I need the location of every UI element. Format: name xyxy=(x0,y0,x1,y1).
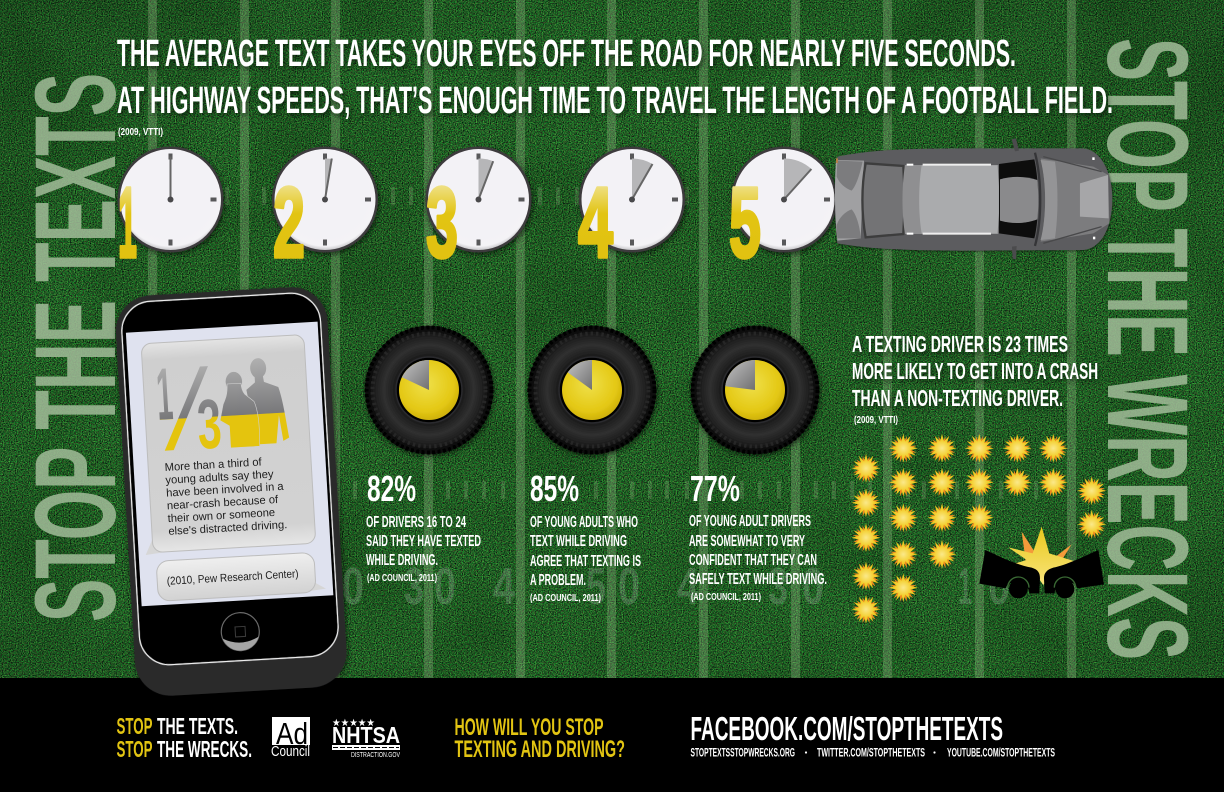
phone xyxy=(114,285,349,698)
field yard numbers: 0 xyxy=(342,558,364,616)
stat 85 percent: OF YOUNG ADULTS WHO xyxy=(530,514,638,531)
message text: near-crash because of xyxy=(167,494,279,512)
logo: nhtsa: NHTSA xyxy=(332,722,400,748)
clock numerals xyxy=(118,167,761,279)
stat 85 percent: (AD COUNCIL, 2011) xyxy=(530,593,601,604)
title xyxy=(117,33,1113,122)
stat 82 percent: WHILE DRIVING. xyxy=(366,552,438,569)
stat 82 percent: (AD COUNCIL, 2011) xyxy=(367,573,437,584)
crash statistic source: (2009, VTTI) xyxy=(854,415,898,426)
campaign slogan: THE WRECKS. xyxy=(157,736,252,762)
logo: ad council: Council xyxy=(271,743,310,760)
web links: TWITTER.COM/STOPTHETEXTS xyxy=(817,748,925,760)
clock 1 xyxy=(118,146,224,252)
facebook address: FACEBOOK.COM/STOPTHETEXTS xyxy=(690,710,1003,747)
message text: have been involved in a xyxy=(166,481,285,500)
clock numerals: 3 xyxy=(426,167,458,279)
stat 85 percent: AGREE THAT TEXTING IS xyxy=(530,553,641,570)
one third graphic xyxy=(154,346,290,466)
phone screen xyxy=(126,322,333,606)
clock numerals: 4 xyxy=(578,167,613,279)
clock 5 xyxy=(731,146,837,252)
clock 4 xyxy=(579,146,685,252)
one third graphic: 1 xyxy=(154,352,175,436)
field yard numbers: 3 xyxy=(404,558,424,616)
logo: ad council xyxy=(271,716,310,760)
stat 77 percent: CONFIDENT THAT THEY CAN xyxy=(689,552,817,569)
stat 77 percent: ARE SOMEWHAT TO VERY xyxy=(689,533,805,550)
stat 85 percent xyxy=(530,468,641,604)
message text: More than a third of xyxy=(164,456,263,474)
crash statistic text: A TEXTING DRIVER IS 23 TIMES xyxy=(852,331,1068,357)
message bubble xyxy=(134,334,316,555)
message text: young adults say they xyxy=(165,469,274,487)
logo: nhtsa: ★★★★★ xyxy=(332,718,375,729)
stat 85 percent: 85% xyxy=(530,468,579,509)
clock numerals: 1 xyxy=(118,167,137,279)
clock 2 xyxy=(272,146,378,252)
crash statistic text: THAN A NON-TEXTING DRIVER. xyxy=(852,385,1063,411)
call to action: HOW WILL YOU STOP xyxy=(454,714,604,741)
car top view xyxy=(835,138,1112,259)
silhouette: woman xyxy=(217,370,260,448)
logo: ad council: Ad xyxy=(276,716,308,751)
field yard numbers: 4 xyxy=(677,558,699,616)
footer xyxy=(0,678,1224,792)
title source: (2009, VTTI) xyxy=(118,127,163,138)
field yard numbers: 4 xyxy=(493,558,515,616)
clock 3 xyxy=(426,146,532,252)
stat 85 percent: TEXT WHILE DRIVING xyxy=(530,533,627,550)
stat 77 percent xyxy=(689,468,827,603)
source bubble xyxy=(156,552,326,601)
source bubble: (2010, Pew Research Center) xyxy=(166,568,299,588)
field hash marks xyxy=(170,187,1038,499)
tire chart 85 percent xyxy=(528,326,656,454)
icon: car crash xyxy=(979,527,1104,598)
campaign slogan: STOP xyxy=(116,736,152,762)
field yard numbers: 1 xyxy=(958,558,972,616)
message text: else's distracted driving. xyxy=(168,519,288,538)
stat 82 percent: 82% xyxy=(367,468,416,509)
stat 77 percent: (AD COUNCIL, 2011) xyxy=(691,592,761,603)
campaign slogan: STOP xyxy=(116,713,152,739)
23 explosion icons xyxy=(850,433,1108,627)
clock numerals: 5 xyxy=(729,167,761,279)
stat 77 percent: 77% xyxy=(690,468,740,509)
clock numerals: 2 xyxy=(273,167,305,279)
field yard numbers: 0 xyxy=(988,558,1010,616)
field yard numbers: 0 xyxy=(434,558,456,616)
call to action: TEXTING AND DRIVING? xyxy=(454,736,625,763)
crash statistic text xyxy=(852,331,1098,411)
call to action xyxy=(454,714,625,763)
field yard numbers: 0 xyxy=(802,558,824,616)
field yard numbers: 0 xyxy=(618,558,640,616)
field yard numbers: 3 xyxy=(768,558,788,616)
stat 77 percent: SAFELY TEXT WHILE DRIVING. xyxy=(689,571,827,588)
stat 82 percent: SAID THEY HAVE TEXTED xyxy=(366,533,481,550)
one third graphic: 3 xyxy=(195,384,224,464)
home button xyxy=(220,612,260,652)
web links xyxy=(690,748,1055,760)
field yard numbers xyxy=(342,558,1010,616)
stat 77 percent: OF YOUNG ADULT DRIVERS xyxy=(689,513,811,530)
campaign slogan xyxy=(116,713,252,762)
web links: YOUTUBE.COM/STOPTHETEXTS xyxy=(947,748,1055,760)
message text xyxy=(164,455,288,538)
silhouette: man xyxy=(245,357,289,445)
campaign slogan: THE TEXTS. xyxy=(157,713,238,739)
web links: STOPTEXTSSTOPWRECKS.ORG xyxy=(690,748,795,760)
tire chart 82 percent xyxy=(365,326,493,454)
tire chart 77 percent xyxy=(691,326,819,454)
football field yard lines xyxy=(148,0,1076,680)
field yard numbers: 5 xyxy=(586,558,606,616)
logo: nhtsa xyxy=(332,718,400,759)
logo: nhtsa: DISTRACTION.GOV xyxy=(351,752,400,759)
stat 82 percent: OF DRIVERS 16 TO 24 xyxy=(366,514,466,531)
message text: their own or someone xyxy=(167,507,275,525)
stat 82 percent xyxy=(366,468,481,584)
phone body xyxy=(114,285,349,698)
stat 85 percent: A PROBLEM. xyxy=(530,572,586,589)
